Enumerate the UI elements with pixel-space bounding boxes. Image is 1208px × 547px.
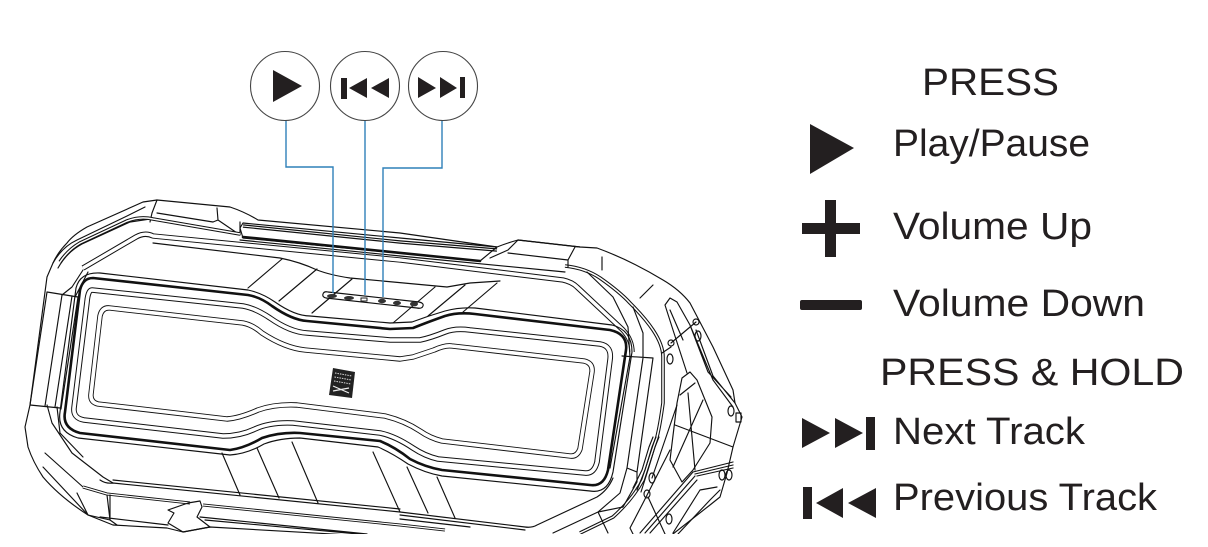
legend row: play/pause	[810, 123, 1090, 174]
legend row: next track: Next Track	[893, 411, 1086, 453]
main thick frame	[65, 278, 626, 485]
middle frame double line	[74, 290, 610, 473]
lower inner contour	[100, 478, 613, 527]
right side body panels	[630, 298, 735, 534]
top inner shoulder	[83, 234, 632, 352]
legend row: next track	[802, 411, 1086, 453]
right bumper seams	[553, 272, 653, 533]
callout: next track button	[408, 52, 478, 120]
legend row: volume up: Volume Up	[893, 206, 1092, 248]
top bar	[240, 223, 653, 298]
control button strip	[323, 292, 423, 308]
central waist line	[153, 243, 500, 287]
upper bumper double contour	[60, 218, 663, 533]
bottom band lines	[83, 487, 470, 536]
brand logo badge	[329, 368, 355, 398]
left bumper contours	[30, 200, 240, 525]
frame outer thin line	[60, 273, 632, 491]
heading: press and hold: PRESS & HOLD	[880, 352, 1184, 394]
front panel diagonal ribs	[222, 259, 497, 518]
speaker line drawing	[25, 200, 742, 536]
legend row: volume down	[800, 283, 1145, 325]
legend row: volume up	[802, 200, 1092, 257]
side screws	[644, 319, 741, 524]
heading: press: PRESS	[922, 62, 1059, 104]
legend row: play/pause: Play/Pause	[893, 123, 1090, 165]
outer silhouette	[25, 200, 742, 536]
inner window double line	[91, 308, 592, 456]
legend row: previous track: Previous Track	[893, 477, 1158, 519]
callout: previous track button	[330, 52, 400, 120]
callout: play button	[250, 52, 320, 120]
legend row: volume down: Volume Down	[893, 283, 1145, 325]
leader lines	[286, 120, 442, 297]
